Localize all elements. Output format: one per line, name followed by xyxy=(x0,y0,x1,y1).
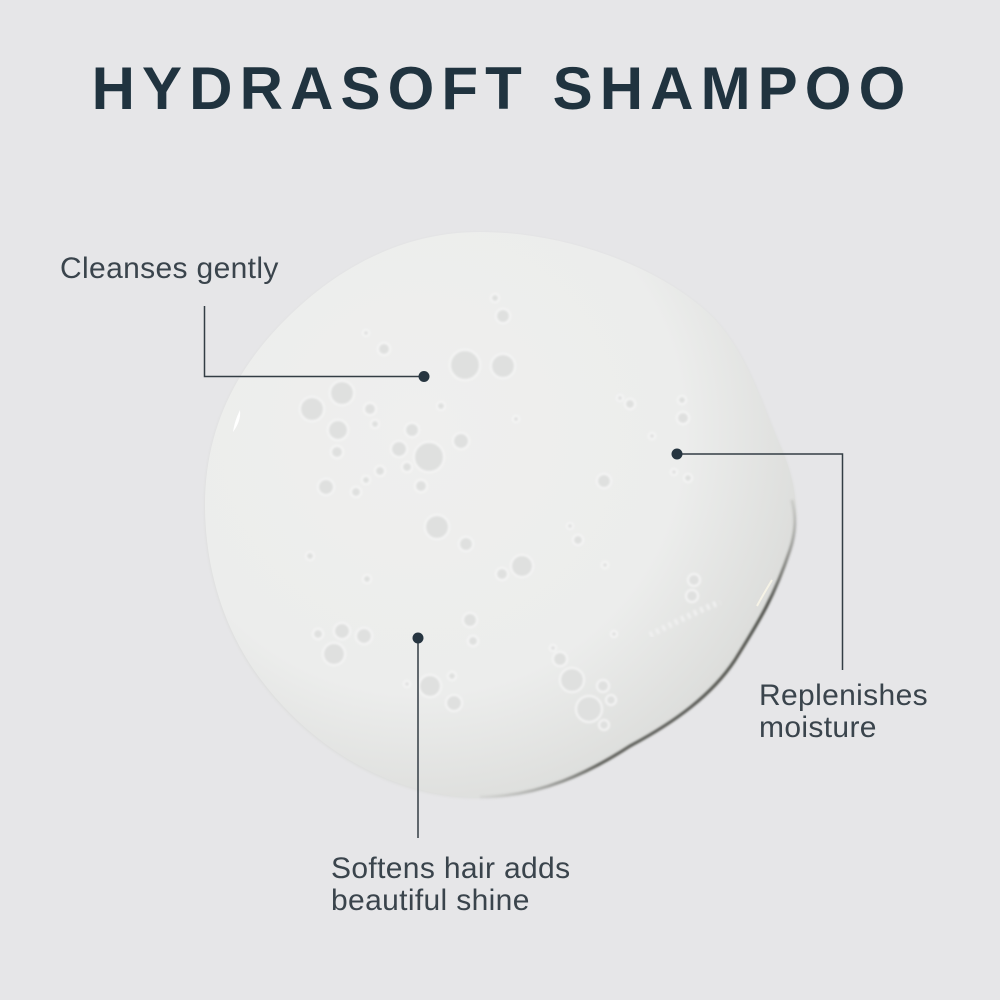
label: cleanses gently: Cleanses gently xyxy=(60,252,279,285)
label: replenishes moisture: moisture xyxy=(759,711,877,744)
label: softens hair xyxy=(331,852,570,917)
label: softens hair: beautiful shine xyxy=(331,884,530,917)
label: replenishes moisture xyxy=(759,679,928,744)
label: softens hair: Softens hair adds xyxy=(331,852,570,885)
label: replenishes moisture: Replenishes xyxy=(759,679,928,712)
title: HYDRASOFT SHAMPOO xyxy=(92,55,912,122)
